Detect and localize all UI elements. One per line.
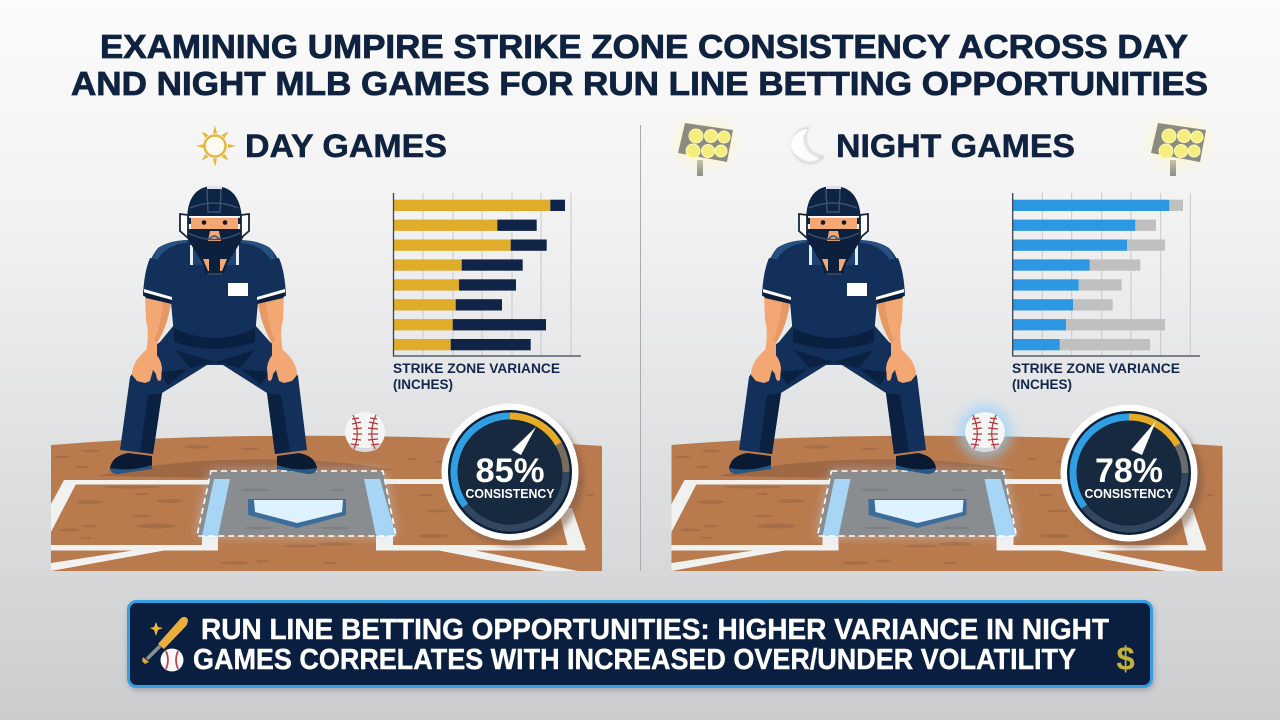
gauge: 78% consistency: [1060, 404, 1203, 548]
gauge: 78% consistency: 78%: [1095, 452, 1163, 490]
icon: bat and ball: [142, 617, 188, 672]
panel: day games: [51, 125, 602, 571]
chart label: day: (INCHES): [393, 377, 453, 392]
panel: night games: [672, 119, 1222, 571]
banner text: [193, 614, 1110, 676]
bar chart: night variance: [1013, 193, 1200, 356]
title: AND NIGHT MLB GAMES FOR RUN LINE BETTING OPPORTUNITIES: [71, 65, 1208, 102]
umpire: day: [110, 186, 317, 474]
heading: day games: DAY GAMES: [245, 128, 447, 164]
icon: glowing baseball: [959, 406, 1011, 458]
icon: floodlight left: [673, 119, 737, 176]
gauge: 85% consistency: 85%: [476, 452, 544, 490]
chart label: night: STRIKE ZONE VARIANCE: [1012, 361, 1180, 376]
heading: night games: NIGHT GAMES: [836, 128, 1075, 164]
title: [71, 28, 1208, 102]
field: day: [51, 436, 602, 571]
title: EXAMINING UMPIRE STRIKE ZONE CONSISTENCY ACROSS DAY: [100, 28, 1188, 65]
callout: betting banner: [128, 602, 1154, 690]
umpire: night: [729, 186, 936, 474]
banner text: GAMES CORRELATES WITH INCREASED OVER/UNDER VOLATILITY: [193, 644, 1076, 676]
field: night: [672, 436, 1222, 571]
divider: [640, 125, 641, 571]
icon: baseball: [345, 412, 385, 452]
gauge: 85% consistency: [442, 404, 584, 547]
bar chart: day variance: [394, 193, 581, 356]
icon: moon: [791, 128, 823, 163]
gauge: 78% consistency: CONSISTENCY: [1084, 487, 1174, 501]
icon: floodlight right: [1146, 119, 1210, 176]
chart label: night: (INCHES): [1012, 377, 1072, 392]
chart label: day: [393, 361, 560, 392]
gauge: 85% consistency: CONSISTENCY: [466, 487, 555, 501]
banner text: RUN LINE BETTING OPPORTUNITIES: HIGHER VARIANCE IN NIGHT: [201, 614, 1110, 646]
chart label: night: [1012, 361, 1180, 392]
chart label: day: STRIKE ZONE VARIANCE: [393, 361, 560, 376]
icon: sun: [196, 125, 236, 167]
icon: dollar sign: $: [1116, 640, 1135, 677]
